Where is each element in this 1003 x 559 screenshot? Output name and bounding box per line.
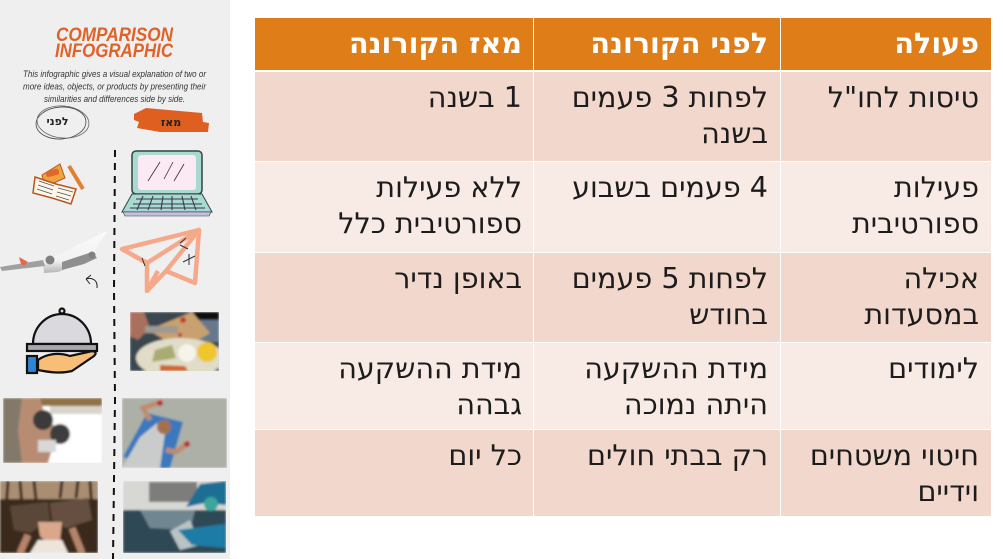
header: before corona: לפני הקורונה (590, 26, 768, 60)
table row: flights abroad: 1 בשנה (428, 80, 522, 114)
table row: sports activity: פעילות (894, 170, 979, 204)
table header (255, 18, 991, 70)
header: since corona (255, 18, 533, 70)
title: COMPARISON (56, 25, 174, 46)
label: before: לפני (46, 115, 69, 128)
table row: eating at restaurants: לפחות 5 פעמים (572, 261, 768, 295)
description text: similarities and differences side by side. (44, 94, 185, 104)
table row: studies: לימודים (888, 351, 979, 385)
icon: airplane (0, 232, 107, 288)
title (55, 25, 174, 62)
panel: comparison infographic (0, 0, 230, 559)
table row: eating at restaurants: באופן נדיר (394, 261, 522, 295)
table row: studies: מידת ההשקעה (338, 351, 522, 385)
table row: eating at restaurants: בחודש (689, 297, 768, 331)
photo: woman lifting dumbbells (3, 398, 102, 463)
table row: disinfecting surfaces and hands: וידיים (917, 474, 979, 508)
label: before (35, 104, 90, 141)
header: action: פעולה (894, 26, 979, 60)
table row: sports activity: ספורטיבית (852, 206, 979, 240)
table row: disinfecting surfaces and hands: רק בבתי חולים (587, 438, 768, 472)
table row: studies: מידת ההשקעה (584, 351, 768, 385)
table row: sports activity: ללא פעילות (376, 170, 522, 204)
header: since corona: מאז הקורונה (349, 26, 522, 60)
table row: sports activity: 4 פעמים בשבוע (572, 170, 768, 204)
icon: paper plane (122, 230, 199, 291)
header: before corona (534, 18, 780, 70)
title: INFOGRAPHIC (55, 41, 173, 62)
description text: more ideas, objects, or products by presenting their (23, 82, 207, 92)
table row: flights abroad (255, 72, 991, 161)
icon: notebook and pen (33, 164, 83, 204)
table row: sports activity: ספורטיבית כלל (338, 206, 522, 240)
table row: eating at restaurants (255, 253, 991, 342)
table row: flights abroad: לפחות 3 פעמים (572, 80, 768, 114)
table row: disinfecting surfaces and hands (255, 430, 991, 516)
dashed divider (113, 150, 115, 559)
icon: serving cloche (27, 308, 97, 373)
table row: studies: היתה נמוכה (624, 387, 768, 421)
photo: cleaning surfaces with gloves (123, 481, 226, 553)
table row: disinfecting surfaces and hands: חיטוי משטחים (810, 438, 979, 472)
table row: studies: גבהה (456, 387, 522, 421)
label: since: מאז (161, 116, 181, 129)
label: since (134, 108, 209, 132)
photo: food preparation (130, 312, 219, 371)
table row: eating at restaurants: אכילה (903, 261, 979, 295)
table row: flights abroad: טיסות לחו"ל (828, 80, 979, 114)
photo: woman with dirty hands (0, 481, 98, 553)
description text: This infographic gives a visual explanation of two or (23, 69, 207, 79)
table row: eating at restaurants: במסעדות (864, 297, 979, 331)
photo: exhausted man on mat (122, 398, 227, 468)
header: action (781, 18, 991, 70)
table row: studies (255, 343, 991, 429)
table row: disinfecting surfaces and hands: כל יום (448, 438, 522, 472)
description text (23, 69, 207, 104)
icon: laptop (122, 151, 212, 216)
table row: sports activity (255, 162, 991, 252)
table row: flights abroad: בשנה (701, 116, 768, 150)
